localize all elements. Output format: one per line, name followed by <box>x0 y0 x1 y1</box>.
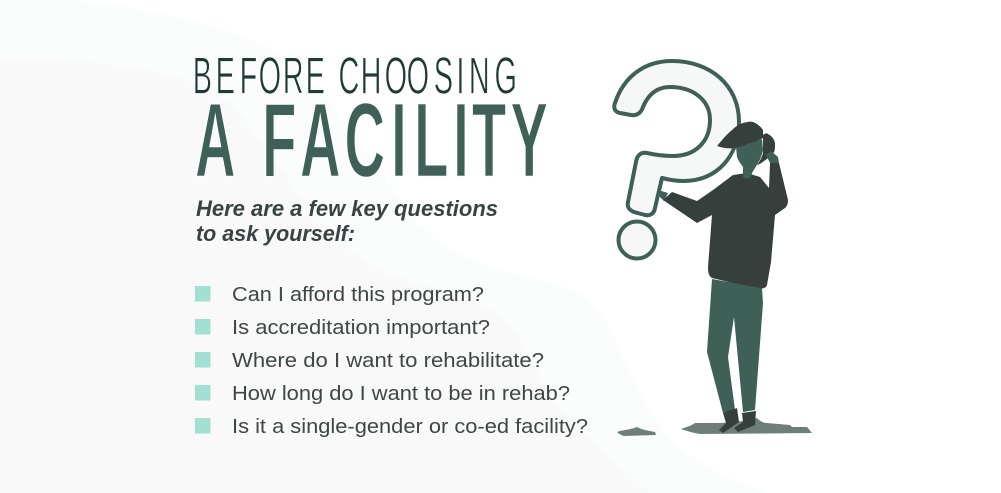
list item 1: Can I afford this program? <box>232 284 484 306</box>
hat <box>717 122 763 148</box>
list item 2: Is accreditation important? <box>232 317 490 339</box>
icon: question mark <box>614 61 739 258</box>
list item 3: Where do I want to rehabilitate? <box>232 350 544 372</box>
left shoe <box>719 408 739 433</box>
ground shadows <box>617 418 812 436</box>
list item 5: Is it a single-gender or co-ed facility? <box>232 416 588 438</box>
hand on question mark <box>658 190 668 201</box>
sweater <box>663 163 788 288</box>
title line: a facility: A FACILITY <box>195 80 548 199</box>
subheading: Here are a few key questions <box>196 196 498 221</box>
ponytail <box>757 133 775 165</box>
title <box>193 47 548 199</box>
title line: before choosing: BEFORE CHOOSING <box>193 47 517 105</box>
question list <box>195 284 588 438</box>
right shoe <box>734 411 756 432</box>
subheading <box>196 196 498 246</box>
list item 4: How long do I want to be in rehab? <box>232 383 570 405</box>
figure: person looking at question mark <box>658 122 788 433</box>
subheading: to ask yourself: <box>196 221 355 246</box>
face and neck <box>736 139 763 178</box>
pants <box>707 279 763 413</box>
raised hand <box>766 151 779 163</box>
